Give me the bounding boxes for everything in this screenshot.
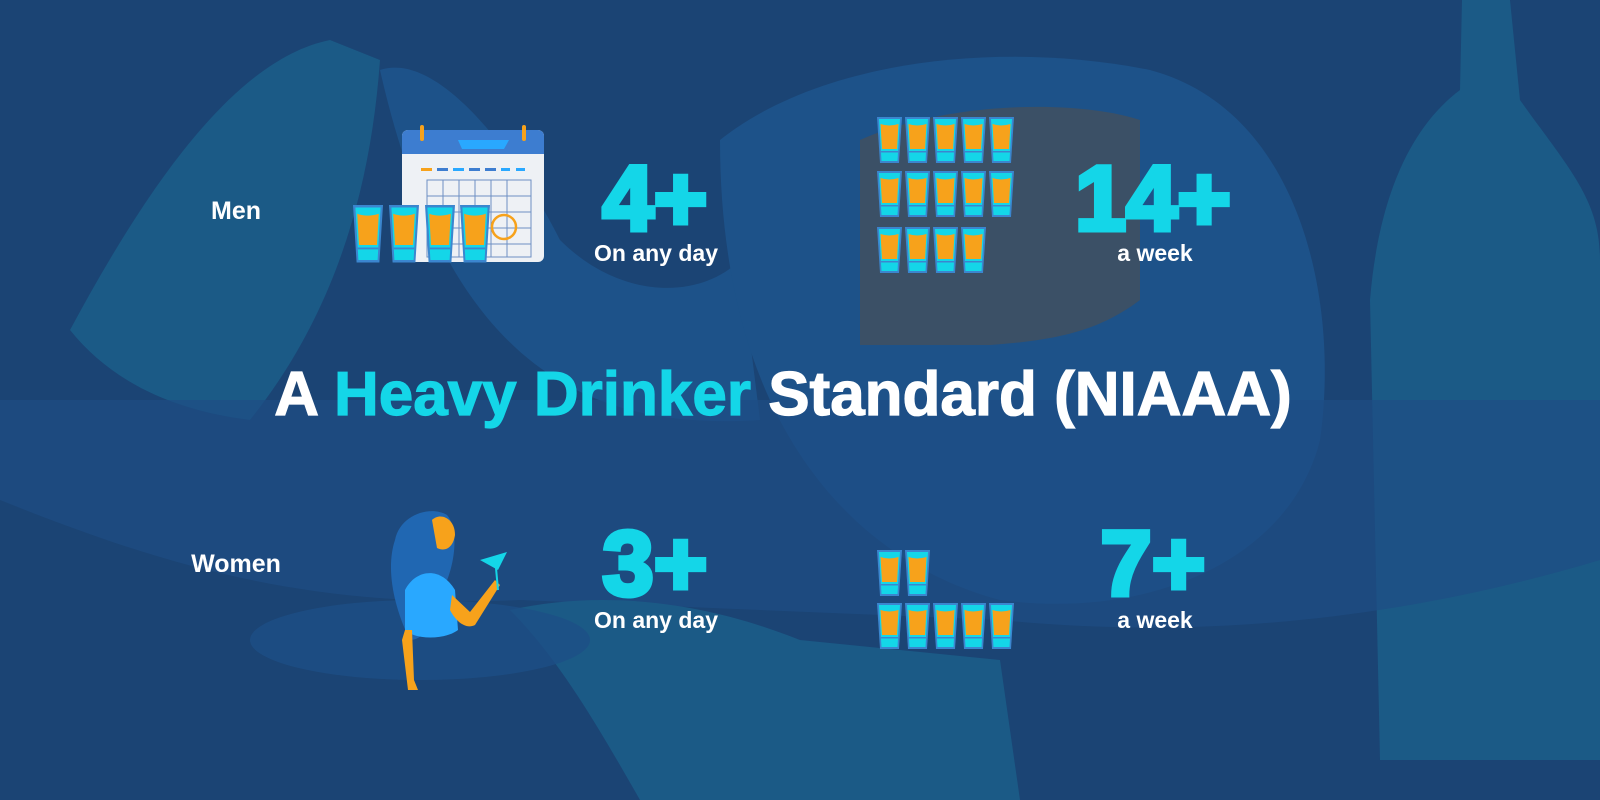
stat: 4+ on any day: On any day (594, 240, 718, 266)
stat: 14+ a week: a week (1117, 240, 1193, 266)
stat: 4+ on any day: 4+ (603, 148, 707, 250)
label: Women: Women (191, 550, 281, 578)
title: A Heavy Drinker Standard (NIAAA) (274, 360, 1292, 429)
stat: 3+ on any day: On any day (594, 607, 718, 633)
stat: 14+ a week: 14+ (1075, 148, 1231, 250)
icon: calendar with drinks (353, 125, 544, 262)
label: Men: Men (211, 197, 261, 225)
icon: 7 glasses (877, 550, 1014, 649)
icon: 14 glasses (877, 117, 1014, 273)
icon: woman with cocktail (391, 511, 507, 690)
stat: 3+ on any day: 3+ (603, 513, 707, 615)
stat: 7+ a week: 7+ (1101, 513, 1205, 615)
stat: 7+ a week: a week (1117, 607, 1193, 633)
